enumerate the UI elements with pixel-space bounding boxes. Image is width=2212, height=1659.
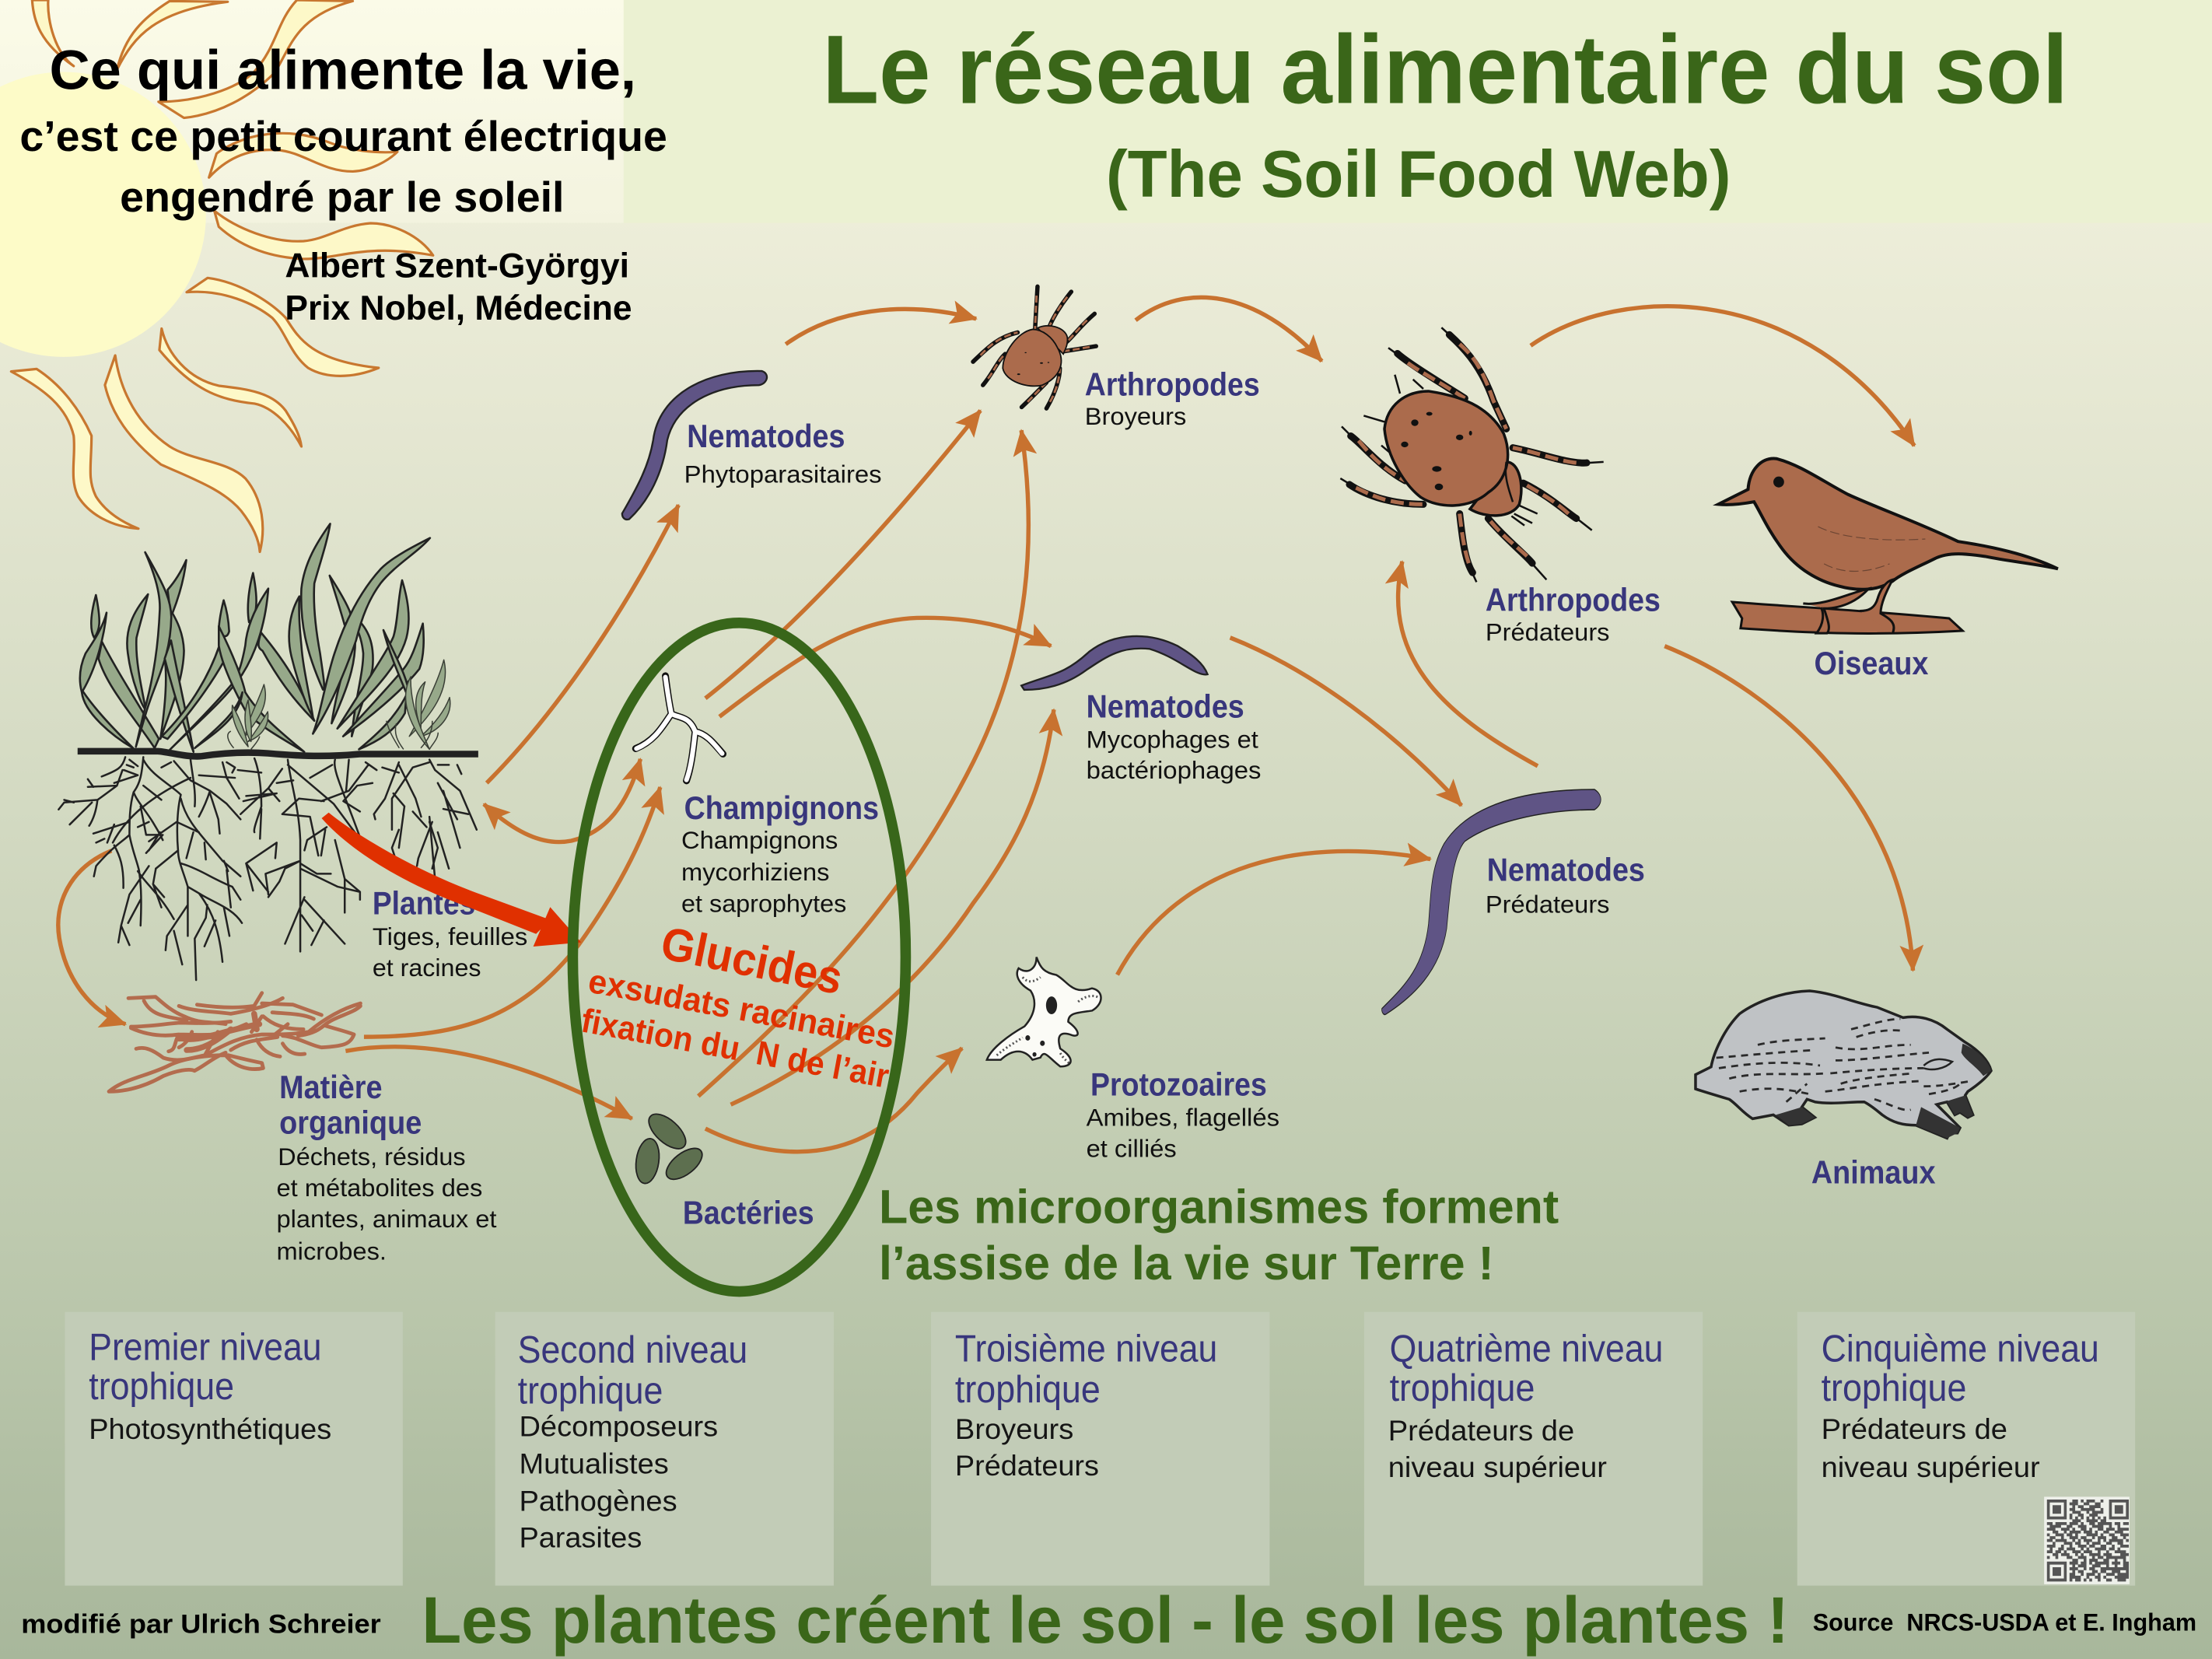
icon: bird (1718, 459, 2058, 633)
label: protozoaires: et cilliés (1087, 1134, 1177, 1162)
label: nematodes predateurs: Nematodes (1487, 852, 1645, 888)
icon: large mite (1340, 327, 1604, 582)
label: champignons: Champignons (681, 826, 838, 854)
quote: engendré par le soleil (120, 173, 565, 221)
label: arthropodes predateurs: Prédateurs (1486, 618, 1610, 646)
label: protozoaires: Protozoaires (1090, 1066, 1267, 1102)
callout: glucides: exsudats racinaires (586, 963, 898, 1056)
label: arthropodes predateurs (1486, 581, 1661, 646)
label: nematodes mycophages: Nematodes (1087, 688, 1244, 724)
credit: author: modifié par Ulrich Schreier (21, 1609, 381, 1639)
panel: troisieme niveau: Broyeurs (955, 1412, 1073, 1445)
callout: glucides: fixation du N de l’air (579, 1003, 892, 1096)
label: matiere organique: microbes. (276, 1237, 387, 1265)
callout: microorganisms: l’assise de la vie sur Terre ! (879, 1237, 1494, 1290)
panel: premier niveau: Photosynthétiques (89, 1412, 331, 1445)
panel: second niveau: Parasites (519, 1521, 642, 1554)
panel: quatrieme niveau: Quatrième niveau (1390, 1328, 1663, 1370)
panel: premier niveau: trophique (89, 1366, 234, 1408)
label: nematodes phytoparasites: Nematodes (687, 418, 845, 454)
panel: second niveau: Second niveau (518, 1329, 747, 1371)
label: nematodes mycophages: bactériophages (1087, 756, 1262, 784)
label: arthropodes broyeurs: Broyeurs (1085, 402, 1186, 430)
label: protozoaires: Amibes, flagellés (1087, 1103, 1279, 1131)
label: champignons: Champignons (684, 789, 879, 826)
icon: bacteria (633, 1108, 707, 1185)
icon: grass leaves (80, 523, 450, 752)
panel: premier niveau: Premier niveau (89, 1326, 322, 1368)
icon: organic matter (109, 993, 360, 1091)
icon: nematode mycophage (1021, 636, 1208, 690)
panel: microorganisms ellipse (572, 623, 905, 1292)
callout: microorganisms (879, 1181, 1559, 1290)
quote panel (0, 0, 624, 223)
subtitle: (The Soil Food Web) (1106, 138, 1731, 212)
label: matiere organique (276, 1069, 497, 1265)
panel: second niveau: Pathogènes (519, 1485, 677, 1517)
label: nematodes mycophages (1087, 688, 1262, 784)
credit: source: Source NRCS-USDA et E. Ingham (1813, 1608, 2196, 1636)
quote: Ce qui alimente la vie, (49, 39, 636, 101)
panel: troisieme niveau: Troisième niveau (955, 1328, 1217, 1370)
icon: nematode predator (1382, 789, 1601, 1014)
panel: second niveau (495, 1312, 834, 1586)
quote: Albert Szent-Györgyi (285, 247, 629, 285)
icon: nematode phytoparasite (622, 371, 767, 520)
label: matiere organique: organique (279, 1104, 422, 1140)
label: arthropodes broyeurs: Arthropodes (1085, 366, 1260, 403)
label: oiseaux: Oiseaux (1815, 645, 1928, 681)
label: plantes: Tiges, feuilles (373, 922, 527, 950)
callout: glucides (579, 917, 898, 1096)
panel: troisieme niveau: trophique (955, 1369, 1101, 1411)
icon: QR code (2044, 1496, 2130, 1584)
label: matiere organique: Déchets, résidus (278, 1143, 466, 1171)
panel: cinquieme niveau (1797, 1312, 2135, 1586)
panel: cinquieme niveau: trophique (1822, 1367, 1966, 1409)
label: nematodes mycophages: Mycophages et (1087, 725, 1258, 753)
quote: Prix Nobel, Médecine (285, 289, 632, 327)
panel: cinquieme niveau: niveau supérieur (1822, 1451, 2040, 1483)
panel: second niveau: Décomposeurs (519, 1409, 718, 1442)
label: nematodes predateurs: Prédateurs (1486, 891, 1610, 919)
label: arthropodes predateurs: Arthropodes (1486, 581, 1661, 618)
label: matiere organique: plantes, animaux et (276, 1205, 497, 1233)
icon: small mite (973, 286, 1096, 408)
label: champignons: mycorhiziens (681, 858, 829, 886)
icon: sun (0, 0, 433, 552)
icon: amoeba (987, 957, 1101, 1066)
icon: fungal hypha (635, 676, 723, 781)
icon: roots (58, 757, 477, 980)
label: nematodes phytoparasites: Phytoparasitaires (684, 460, 882, 488)
label: plantes: Plantes (373, 884, 475, 921)
label: protozoaires (1087, 1066, 1279, 1162)
label: plantes (373, 884, 527, 982)
panel: quatrieme niveau: trophique (1390, 1367, 1535, 1409)
soil line (78, 751, 478, 756)
panel: quatrieme niveau: niveau supérieur (1388, 1451, 1607, 1483)
panel: plants illustration (58, 523, 478, 1091)
label: champignons: et saprophytes (681, 890, 846, 918)
quote (19, 39, 667, 327)
callout: microorganisms: Les microorganismes forment (879, 1181, 1559, 1234)
panel: troisieme niveau (931, 1312, 1269, 1586)
arrow: carbon flow (322, 813, 581, 947)
label: bacteries: Bactéries (683, 1194, 814, 1230)
panel: quatrieme niveau (1364, 1312, 1703, 1586)
quote: c’est ce petit courant électrique (19, 113, 667, 160)
panel: second niveau: Mutualistes (519, 1447, 669, 1479)
title: Le réseau alimentaire du sol (822, 15, 2068, 124)
label: plantes: et racines (373, 954, 481, 982)
label: nematodes predateurs (1486, 852, 1645, 919)
label: matiere organique: et métabolites des (276, 1174, 482, 1202)
panel: cinquieme niveau: Cinquième niveau (1822, 1328, 2099, 1370)
slogan: Les plantes créent le sol - le sol les plantes ! (422, 1584, 1789, 1657)
panel: cinquieme niveau: Prédateurs de (1822, 1412, 2007, 1445)
label: arthropodes broyeurs (1085, 366, 1260, 430)
arrows: food web links (58, 297, 1914, 1152)
label: matiere organique: Matière (279, 1069, 383, 1105)
icon: mole (1696, 991, 1991, 1138)
label: champignons (681, 789, 879, 918)
panel: troisieme niveau: Prédateurs (955, 1449, 1099, 1482)
panel: premier niveau (65, 1312, 403, 1586)
callout: glucides: Glucides (656, 917, 847, 1004)
label: nematodes phytoparasites (684, 418, 882, 488)
panel: second niveau: trophique (518, 1370, 663, 1412)
panel: quatrieme niveau: Prédateurs de (1388, 1414, 1574, 1447)
title band (624, 0, 2212, 223)
label: animaux: Animaux (1811, 1154, 1935, 1191)
